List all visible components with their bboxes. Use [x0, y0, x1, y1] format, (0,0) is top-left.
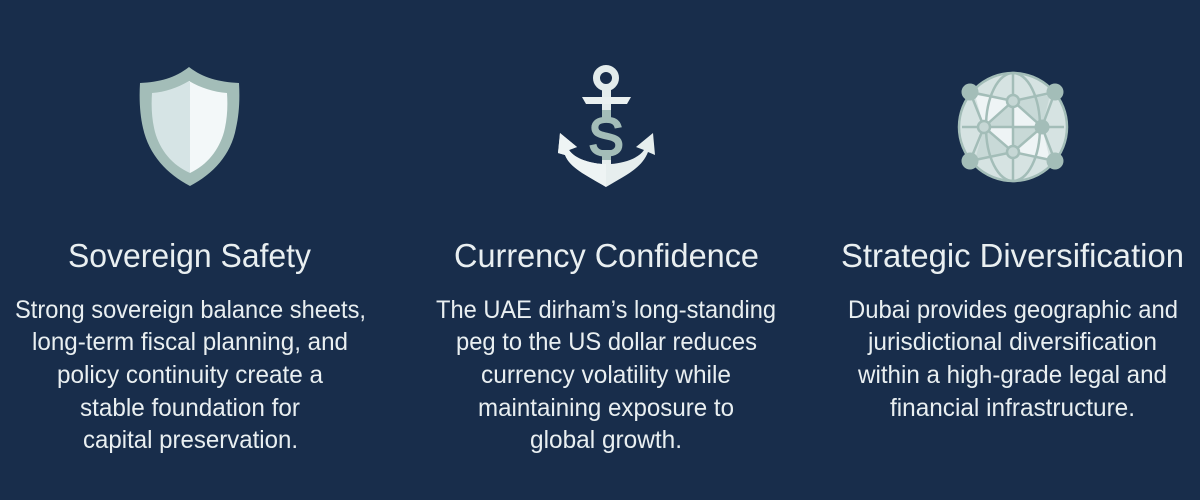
text block: sovereign safety: policy continuity create a — [57, 361, 323, 389]
text block: currency confidence: The UAE dirham’s long-standing — [436, 296, 776, 324]
icon: network globe — [959, 73, 1067, 181]
text block: currency confidence: peg to the US dollar reduces — [456, 328, 757, 356]
panel: sovereign safety — [15, 67, 366, 454]
text block: currency confidence: global growth. — [530, 426, 682, 454]
text block: currency confidence: maintaining exposure to — [478, 394, 734, 422]
text block: strategic diversification — [848, 296, 1178, 422]
text block: strategic diversification: financial infrastructure. — [890, 394, 1135, 422]
text block: strategic diversification: Dubai provides geographic and — [848, 296, 1178, 324]
text block: strategic diversification: within a high-grade legal and — [857, 361, 1167, 389]
heading: sovereign safety: Sovereign Safety — [68, 237, 311, 274]
text block: sovereign safety: long-term fiscal planning, and — [32, 328, 348, 356]
text block: currency confidence: currency volatility while — [481, 361, 731, 389]
text block: sovereign safety: capital preservation. — [83, 426, 298, 454]
text block: currency confidence — [436, 296, 776, 454]
text block: sovereign safety — [15, 296, 366, 454]
icon: shield — [140, 67, 239, 186]
text block: sovereign safety: stable foundation for — [80, 394, 300, 422]
icon: anchor with dollar sign — [558, 68, 655, 187]
panel: currency confidence — [436, 68, 776, 454]
heading: currency confidence: Currency Confidence — [454, 237, 759, 274]
text block: sovereign safety: Strong sovereign balance sheets, — [15, 296, 366, 324]
icon: anchor with dollar sign: S — [588, 108, 624, 167]
heading: strategic diversification: Strategic Diversification — [841, 237, 1184, 274]
text block: strategic diversification: jurisdictional diversification — [867, 328, 1157, 356]
panel: strategic diversification — [841, 73, 1184, 422]
